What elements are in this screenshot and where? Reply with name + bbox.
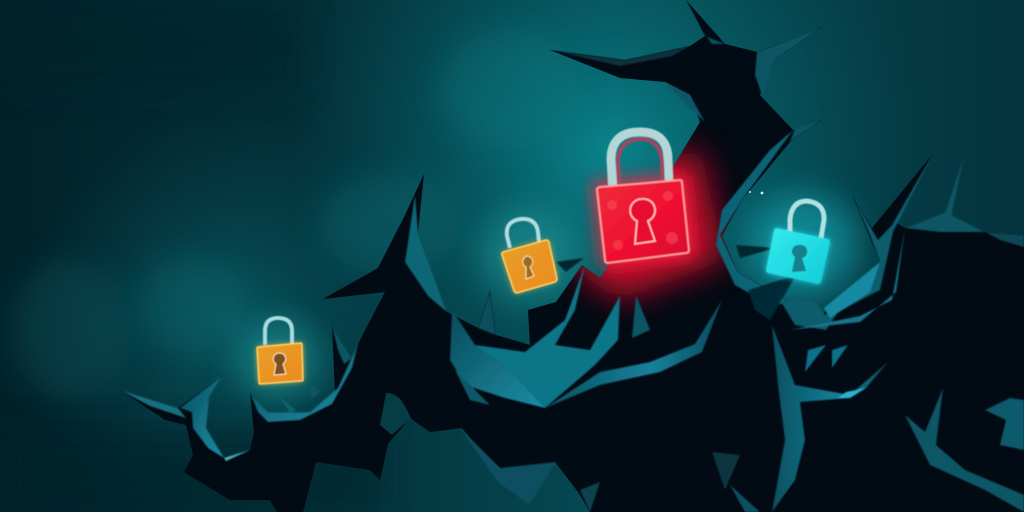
orange lock keyhole	[523, 256, 534, 279]
orange lock shackle	[507, 219, 539, 248]
small lock keyhole	[273, 353, 286, 375]
facet group: lower right blades	[460, 325, 1024, 512]
padlock: medium orange	[502, 219, 557, 293]
small sparkle dots	[749, 191, 763, 194]
red lock texture spots	[607, 191, 678, 250]
padlock: small orange	[257, 318, 303, 384]
red lock body	[597, 180, 689, 263]
facet group: right cluster	[780, 152, 1024, 372]
thorn hole: background showing through	[380, 393, 411, 435]
cyan lock body	[766, 228, 830, 284]
red lock shackle inner tint	[618, 139, 663, 190]
padlock: large red	[592, 132, 694, 268]
red lock keyhole	[630, 199, 655, 244]
lock glow halos on background	[237, 193, 857, 400]
small lock body	[257, 343, 303, 384]
red glow spilling on thorn trunk	[575, 150, 725, 300]
cyan lock keyhole	[792, 245, 807, 272]
facet group: central trunk edge	[550, 0, 822, 320]
facet group: left thorn	[120, 326, 358, 461]
red lock shackle	[611, 132, 669, 190]
orange lock body	[502, 240, 557, 293]
padlock: cyan	[766, 201, 830, 284]
cyan lock shackle	[790, 201, 824, 238]
facet group: middle thorn	[405, 195, 722, 408]
small lock shackle	[265, 318, 292, 345]
